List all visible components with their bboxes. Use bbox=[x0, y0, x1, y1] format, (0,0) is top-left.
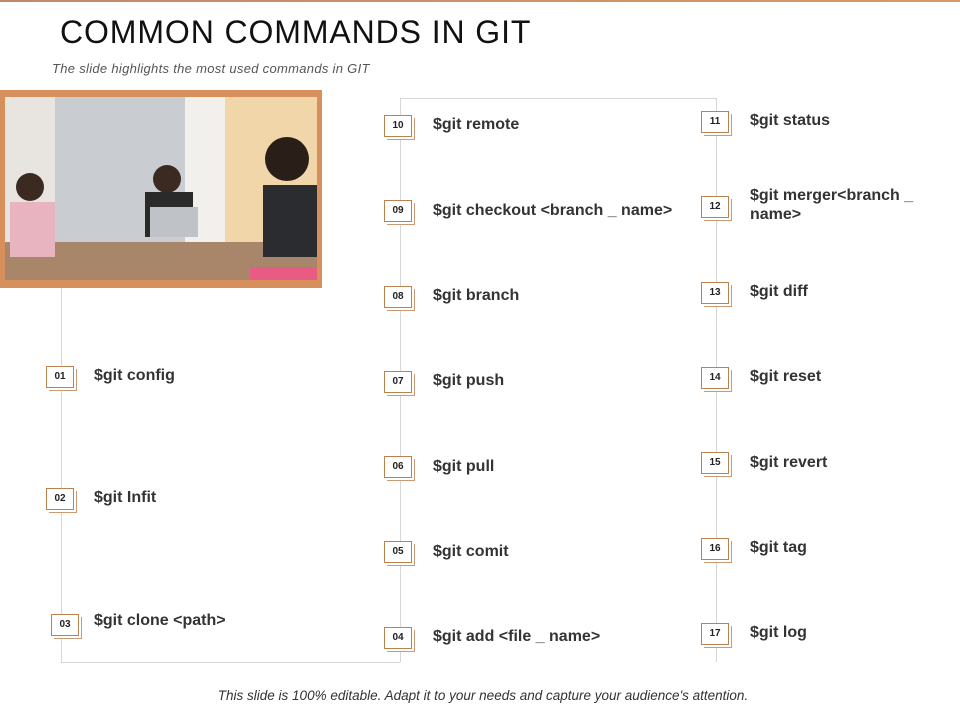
column 3 items: 15 bbox=[709, 457, 721, 468]
column 3 items: 11 bbox=[710, 116, 720, 127]
column 1 items bbox=[46, 366, 226, 639]
column 3 items: $git status bbox=[750, 112, 830, 129]
column 2 items: $git comit bbox=[433, 543, 509, 560]
column 2 items: 05 bbox=[392, 546, 404, 557]
top bar bbox=[0, 0, 960, 2]
column 1 items: $git config bbox=[94, 367, 175, 384]
column 1 items: 03 bbox=[59, 619, 71, 630]
column 2 items: 10 bbox=[392, 120, 404, 131]
column 3 items: 12 bbox=[709, 201, 721, 212]
column 3 items: 16 bbox=[709, 543, 721, 554]
column 3 items: $git revert bbox=[750, 454, 827, 471]
title: COMMON COMMANDS IN GIT bbox=[60, 14, 531, 50]
column 2 items: $git push bbox=[433, 372, 504, 389]
column 3 items: 14 bbox=[709, 372, 721, 383]
column 2 items: 07 bbox=[392, 376, 404, 387]
column 1 items: 01 bbox=[54, 371, 66, 382]
footer: This slide is 100% editable. Adapt it to your needs and capture your audience's attention. bbox=[218, 688, 748, 703]
column 2 items: $git add <file _ name> bbox=[433, 628, 600, 645]
column 2 items: 04 bbox=[392, 632, 404, 643]
subtitle: The slide highlights the most used commands in GIT bbox=[52, 61, 370, 76]
column 3 items: $git merger<branch _ bbox=[750, 187, 913, 204]
photo bbox=[0, 90, 322, 288]
column 3 items: $git tag bbox=[750, 539, 807, 556]
column 2 items: 06 bbox=[392, 461, 404, 472]
column 1 items: $git Infit bbox=[94, 489, 156, 506]
column 3 items bbox=[701, 111, 914, 648]
item 02 bbox=[46, 488, 156, 513]
column 3 items: 17 bbox=[709, 628, 721, 639]
column 3 items: 13 bbox=[709, 287, 721, 298]
item 01 bbox=[46, 366, 175, 391]
item 03 bbox=[51, 612, 226, 639]
column 2 items: $git remote bbox=[433, 116, 519, 133]
column 2 items: 08 bbox=[392, 291, 404, 302]
column 2 items bbox=[384, 115, 672, 652]
column 3 items: name> bbox=[750, 206, 801, 223]
column 2 items: 09 bbox=[392, 205, 404, 216]
column 3 items: $git reset bbox=[750, 368, 821, 385]
column 2 items: $git pull bbox=[433, 458, 494, 475]
column 3 items: $git log bbox=[750, 624, 807, 641]
column 2 items: $git checkout <branch _ name> bbox=[433, 202, 672, 219]
column 1 items: $git clone <path> bbox=[94, 612, 226, 629]
column 3 items: $git diff bbox=[750, 283, 808, 300]
column 1 items: 02 bbox=[54, 493, 66, 504]
column 2 items: $git branch bbox=[433, 287, 519, 304]
